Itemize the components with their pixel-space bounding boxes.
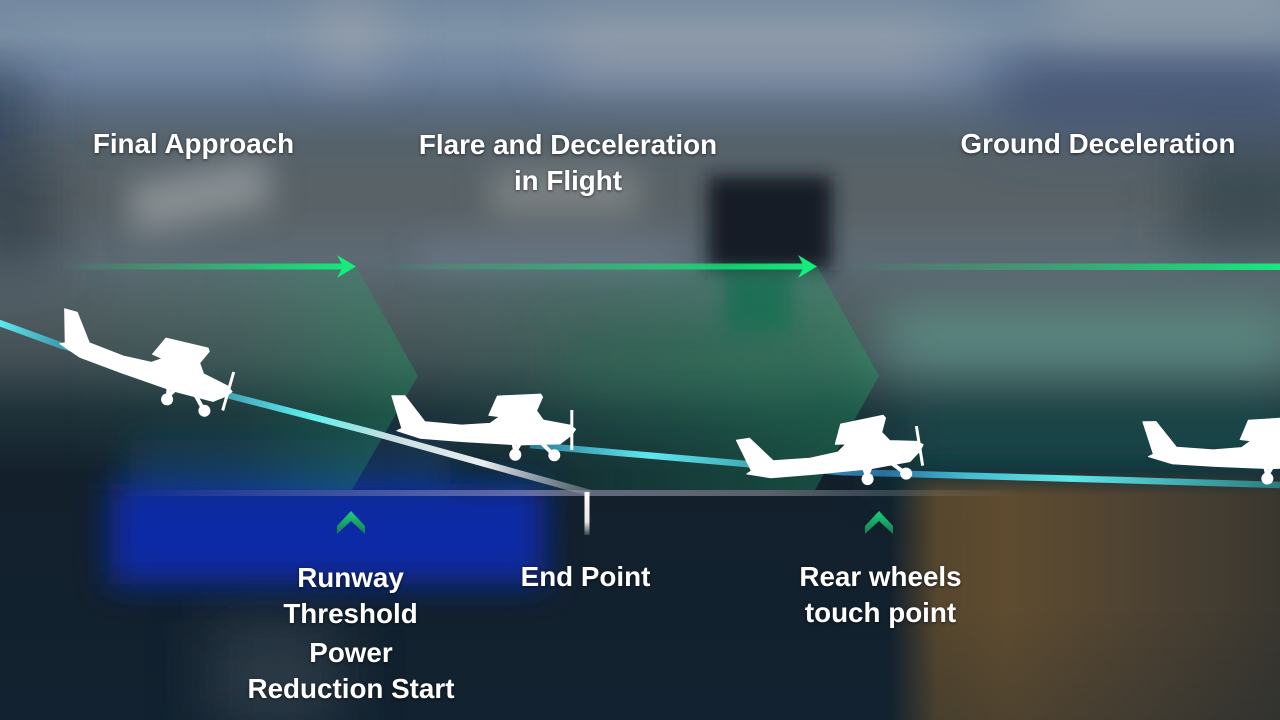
label: runway threshold: Threshold: [283, 598, 418, 629]
heading: final approach: Final Approach: [93, 128, 294, 159]
label: power reduction start: Power: [309, 637, 393, 668]
label: power reduction start: [248, 637, 454, 704]
label: rear wheels touch point: Rear wheels: [799, 561, 962, 592]
heading: flare and deceleration in flight: in Flight: [514, 165, 622, 196]
label: end point: End Point: [521, 561, 650, 592]
label: rear wheels touch point: [799, 561, 962, 630]
label: runway threshold: [283, 562, 418, 629]
heading: flare and deceleration in flight: [419, 129, 717, 199]
label: runway threshold: Runway: [297, 562, 404, 593]
heading: ground deceleration: Ground Deceleration: [961, 128, 1235, 159]
heading: flare and deceleration in flight: Flare and Deceleration: [419, 129, 717, 160]
label: rear wheels touch point: touch point: [805, 597, 956, 628]
label: power reduction start: Reduction Start: [248, 673, 454, 704]
